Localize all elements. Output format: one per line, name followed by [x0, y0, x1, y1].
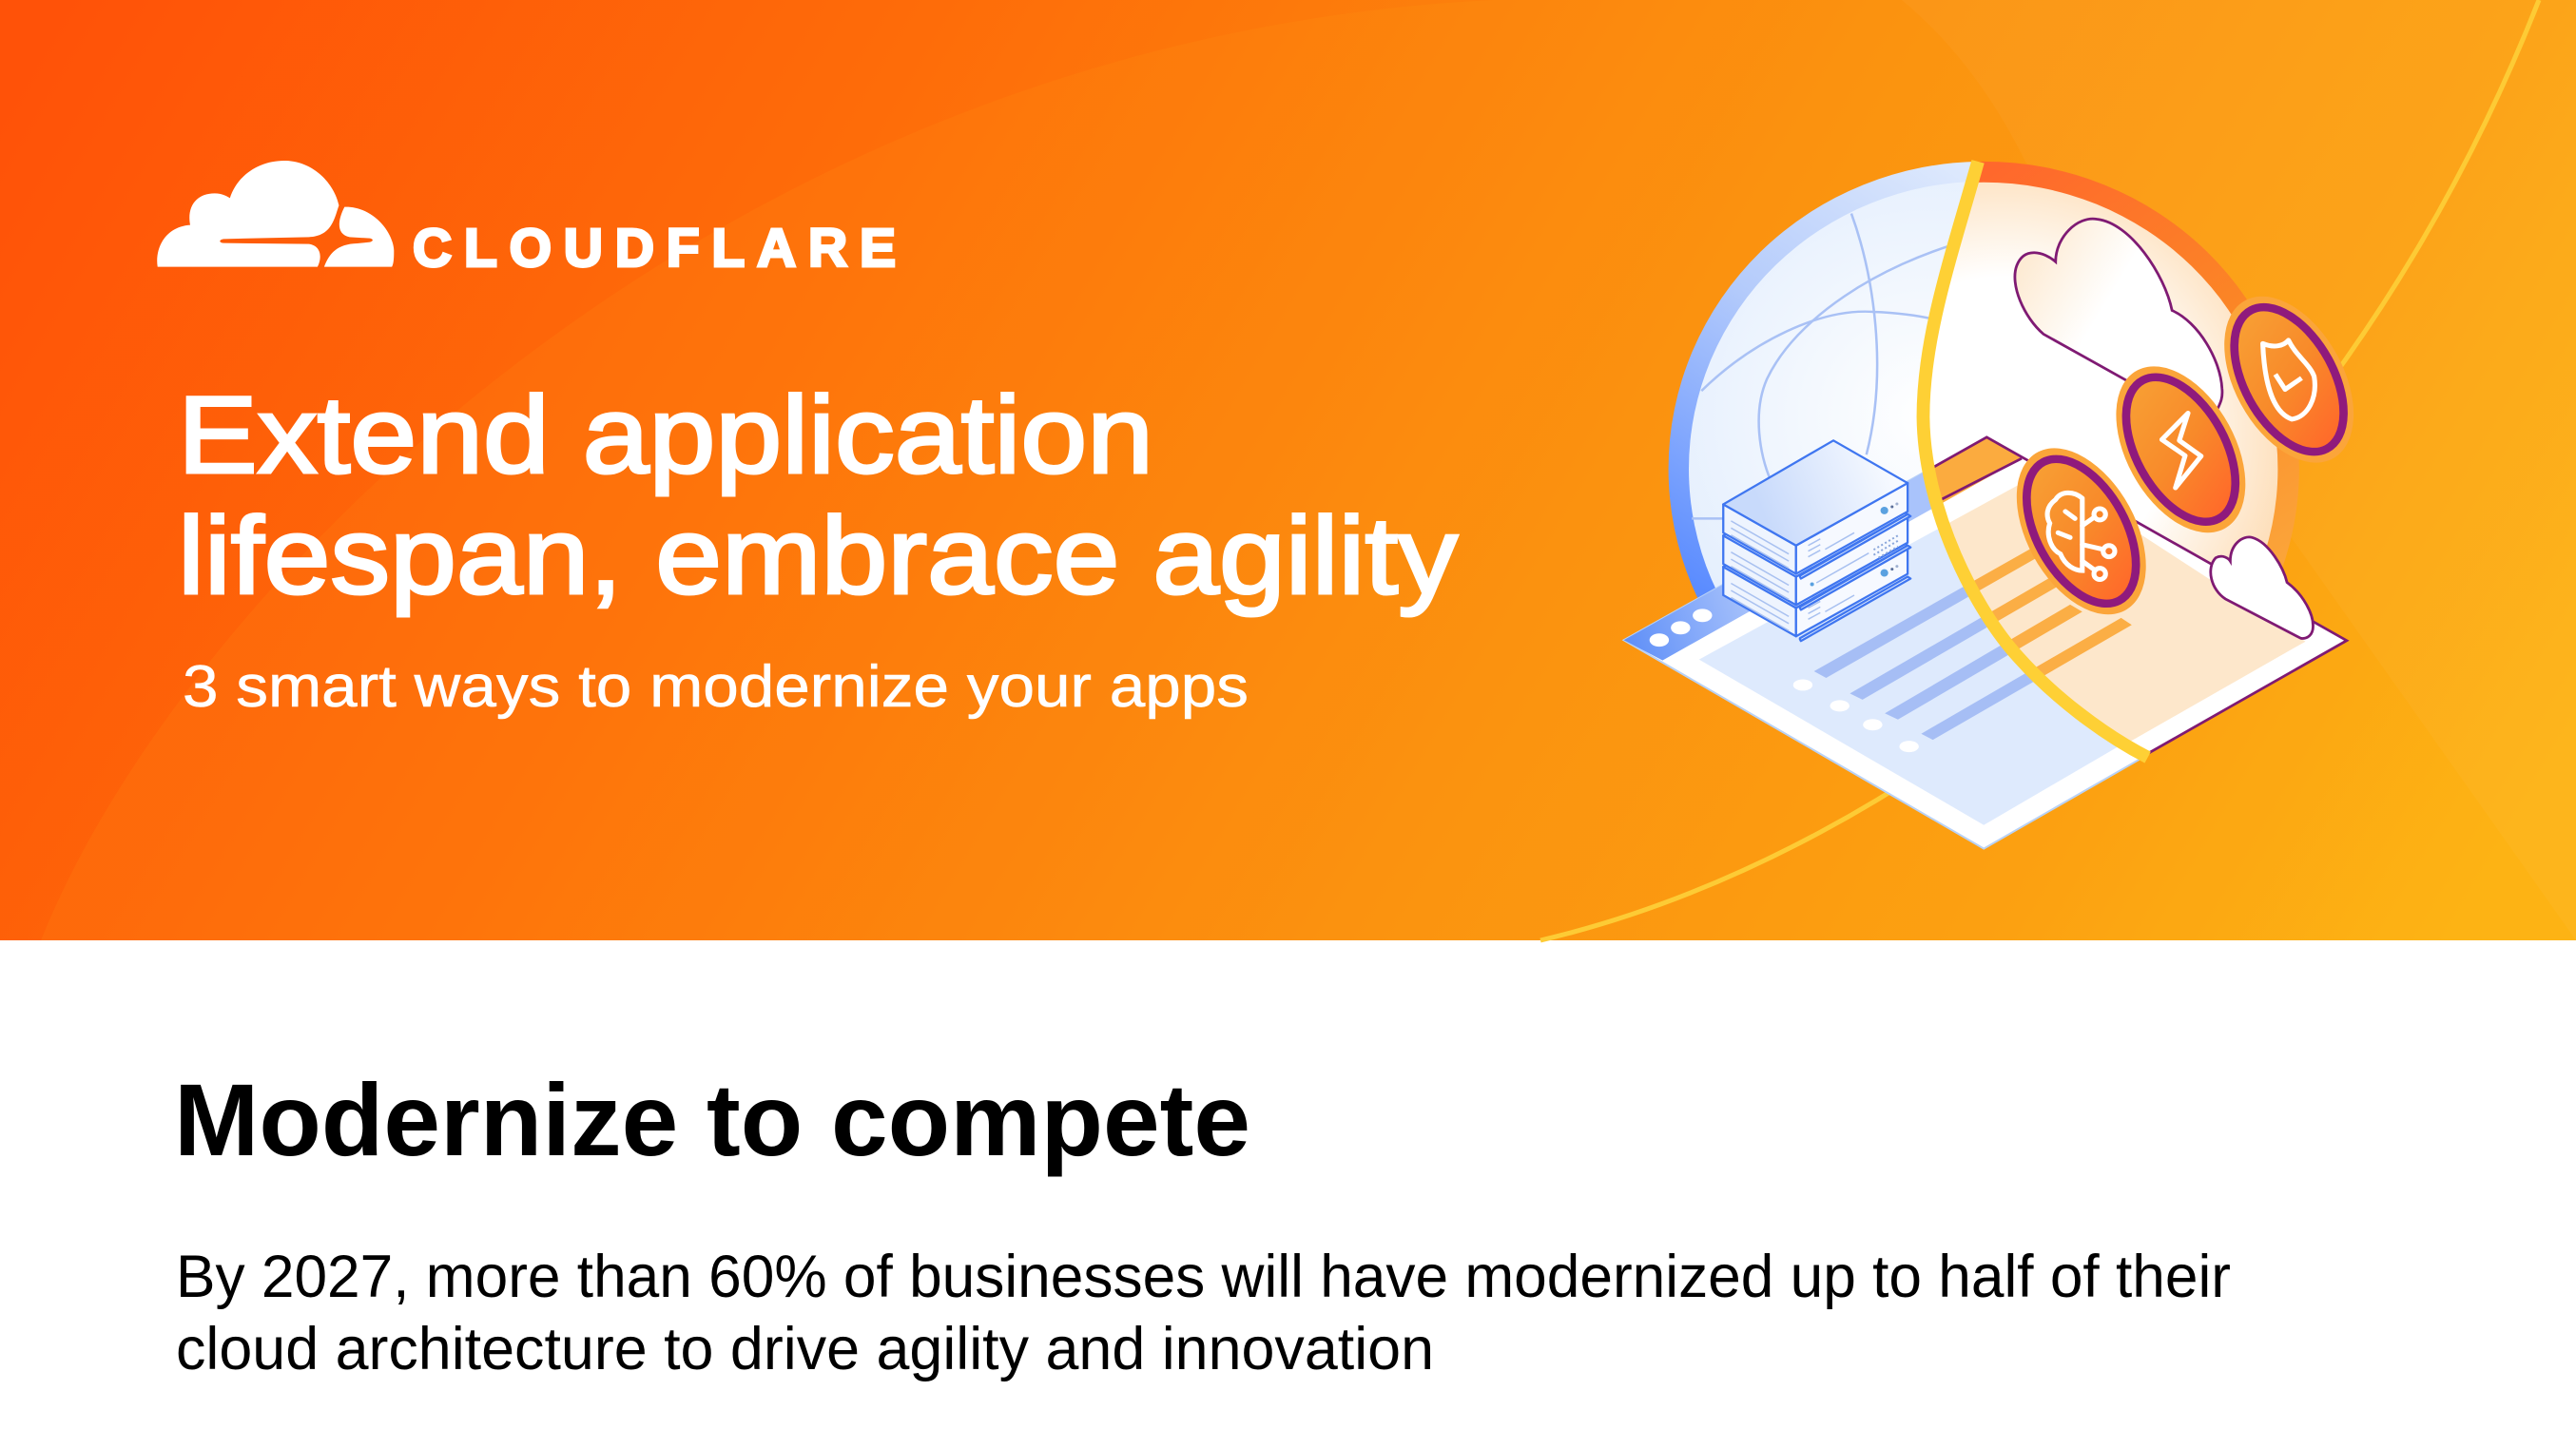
large cloud: [2015, 219, 2222, 410]
badge: AI brain: [1990, 427, 2173, 635]
server: middle unit: [1723, 472, 1910, 609]
logo: Cloudflare: [157, 161, 896, 279]
body text: [176, 1244, 2231, 1382]
body text: cloud architecture to drive agility and innovation: [176, 1316, 1434, 1382]
title: lifespan, embrace agility: [178, 495, 1459, 617]
subtitle: 3 smart ways to modernize your apps: [183, 654, 1249, 720]
title: [178, 375, 1459, 617]
icon: server stack: [1723, 440, 1910, 641]
small cloud: [2211, 537, 2313, 638]
body text: By 2027, more than 60% of businesses will have modernized up to half of their: [176, 1244, 2231, 1310]
badge: lightning bolt: [2089, 345, 2272, 553]
server: bottom unit: [1723, 503, 1910, 641]
header banner: [0, 0, 2576, 940]
title: Extend application: [178, 375, 1153, 496]
window: modern side: [1934, 435, 2349, 754]
section heading: Modernize to compete: [174, 1062, 1250, 1177]
illustration: globe, window, servers and badges: [1624, 162, 2380, 849]
badge: shield: [2198, 276, 2380, 484]
server: top unit: [1723, 440, 1910, 579]
icon: cloud logo mark: [157, 161, 394, 267]
divider curve: [1923, 162, 2148, 758]
window: legacy side: [1622, 472, 2140, 850]
globe: modern side: [1929, 162, 2299, 567]
globe: legacy side: [1668, 162, 1971, 598]
logo wordmark: CLOUDFLARE: [413, 218, 896, 279]
